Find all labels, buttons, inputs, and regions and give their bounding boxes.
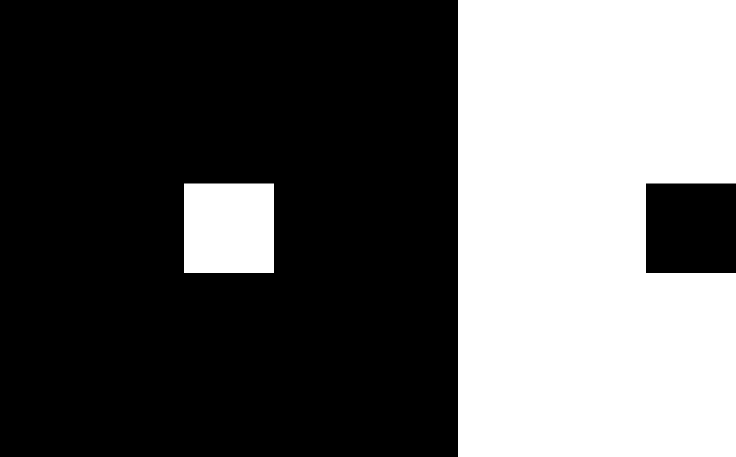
- white center square: [184, 184, 274, 273]
- black square at right edge: [646, 184, 736, 273]
- panel: black square: [0, 0, 458, 457]
